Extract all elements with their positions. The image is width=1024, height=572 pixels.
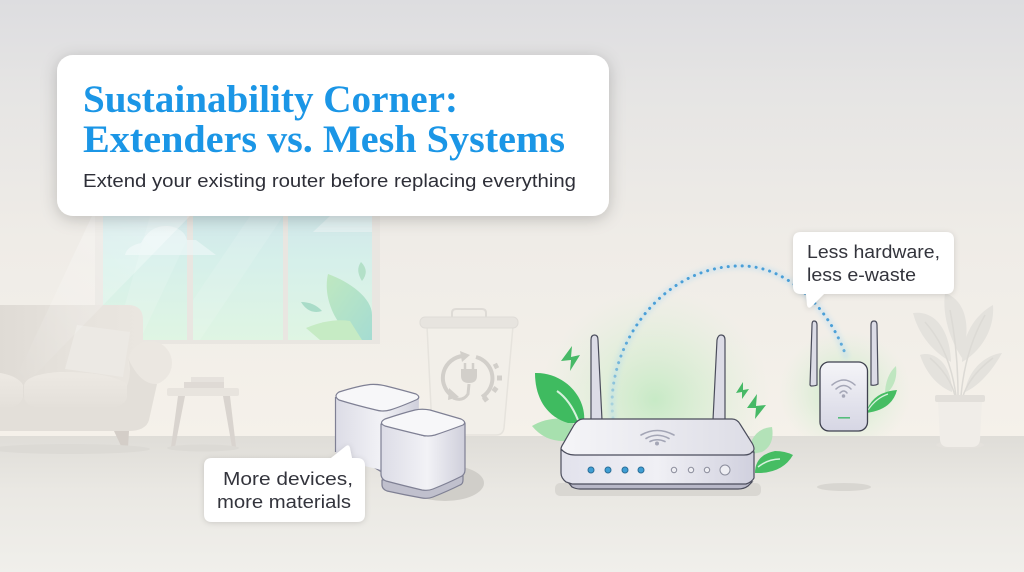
side table [167, 377, 239, 452]
subtitle: Extend your existing router before replacing everything [83, 171, 576, 191]
router base [568, 482, 752, 489]
icon: bolt left [561, 346, 580, 371]
antenna right [713, 335, 725, 420]
callout: more devices: more materials [217, 492, 351, 512]
status lights [588, 465, 730, 475]
window leaves [301, 262, 372, 340]
light ray [15, 216, 190, 380]
title: Extenders vs. Mesh Systems [83, 118, 565, 161]
router [532, 335, 793, 496]
router top [561, 419, 754, 455]
icon: wifi [641, 430, 674, 445]
callout: less hardware: less e-waste [807, 265, 916, 285]
extender leaves [866, 366, 897, 413]
recycling bin [420, 309, 518, 435]
callout: more devices [204, 445, 365, 522]
header card [57, 55, 609, 216]
green glow: extender [797, 348, 893, 436]
router leaves left [532, 373, 584, 441]
sofa [0, 305, 172, 448]
mesh unit back [336, 384, 419, 474]
seat cushions [24, 372, 127, 407]
antenna left [591, 335, 602, 420]
mesh unit front [381, 409, 465, 498]
cloud [125, 226, 216, 255]
icon: bolts right [736, 382, 766, 419]
sofa leg [114, 431, 129, 448]
router leaves right [752, 427, 793, 473]
callout: more devices: More devices, [223, 469, 353, 489]
mesh units [336, 384, 484, 501]
wifi signal arc [612, 266, 846, 418]
title: Sustainability Corner: [83, 78, 458, 121]
extender body [820, 362, 868, 431]
extender [810, 321, 897, 491]
plant [913, 293, 1002, 449]
pillow [65, 325, 130, 377]
window [95, 200, 380, 344]
cloud right [313, 216, 372, 232]
extender antennas [810, 321, 817, 386]
icon: recycle plug [443, 351, 502, 401]
extender status bar [838, 417, 850, 419]
icon: extender wifi [832, 380, 855, 397]
green glow: router [572, 322, 740, 424]
callout: less hardware: Less hardware, [807, 242, 940, 262]
callout: less hardware [793, 232, 954, 308]
router front [561, 450, 754, 484]
